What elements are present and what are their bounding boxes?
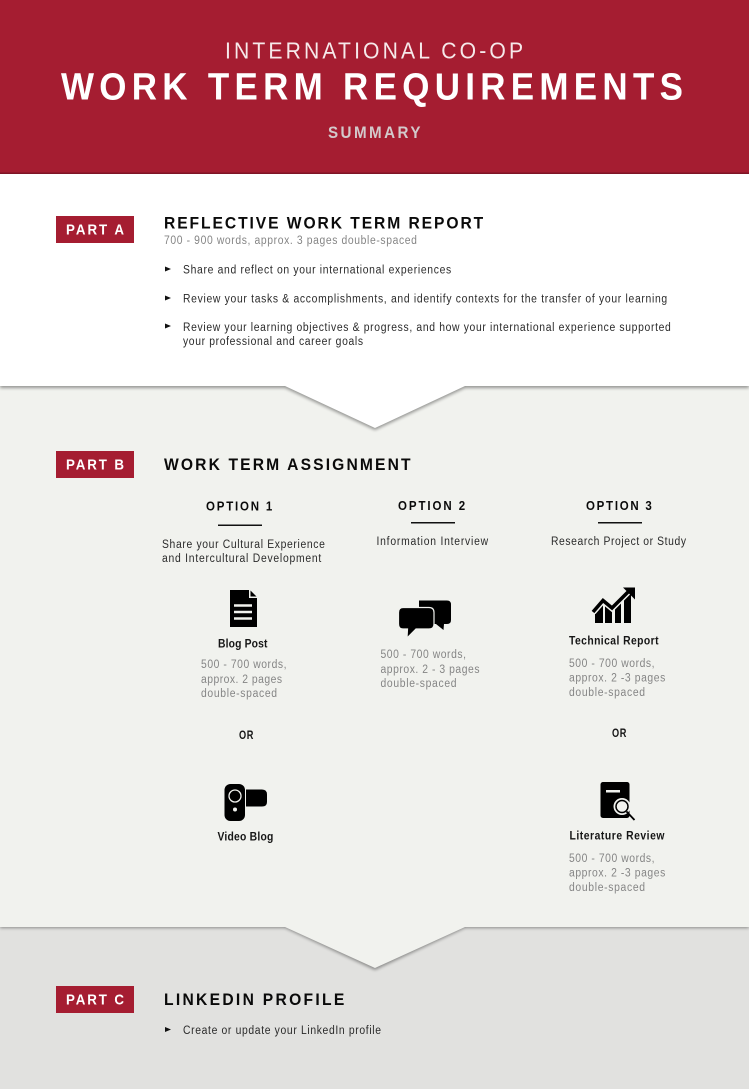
option 2 description: Information Interview [376,536,488,548]
bullet list [165,264,671,348]
or label: OR [612,728,627,740]
interview length [380,649,480,690]
option 1 description [162,539,325,565]
technical report length [569,658,666,699]
badge: part C [56,986,134,1013]
label: literature review: Literature Review [569,830,665,843]
eyebrow title: INTERNATIONAL CO-OP [225,38,523,64]
bullet list: Review your learning objectives & progress, and how your international experience supported [183,322,671,334]
panel: header banner [0,0,749,174]
badge: part B: PART B [66,456,124,473]
icon: video camera [224,784,267,821]
bullet list: Review your tasks & accomplishments, and identify contexts for the transfer of your learning [183,293,667,306]
badge: part A [56,216,134,243]
main title: WORK TERM REQUIREMENTS [61,65,683,108]
subtitle: SUMMARY [328,124,421,142]
technical report length: approx. 2 -3 pages [569,672,666,685]
heading: linkedin profile: LINKEDIN PROFILE [164,991,344,1009]
interview length: 500 - 700 words, [381,649,466,661]
report length note: 700 - 900 words, approx. 3 pages double-spaced [164,235,417,247]
blog post length: approx. 2 pages [201,674,283,686]
label: video blog: Video Blog [217,831,273,844]
badge: part B [56,451,134,478]
bullet list: Share and reflect on your international experiences [183,264,452,277]
column: option 3 [551,499,687,894]
option 2 heading: OPTION 2 [398,499,465,513]
panel: part A background [0,170,749,430]
linkedin bullet: Create or update your LinkedIn profile [183,1025,381,1037]
label: technical report: Technical Report [569,635,659,648]
option 1 heading: OPTION 1 [206,499,273,514]
icon: speech bubbles [398,600,451,638]
icon: document [230,590,258,627]
technical report length: 500 - 700 words, [569,658,655,670]
option 1 description: Share your Cultural Experience [162,539,325,551]
icon: book with magnifier [600,782,634,820]
blog post length [201,659,286,700]
heading: reflective report: REFLECTIVE WORK TERM REPORT [164,214,483,232]
panel: part C background [0,920,749,1089]
badge: part A: PART A [66,221,124,238]
blog post length: double-spaced [201,688,277,700]
interview length: approx. 2 - 3 pages [381,664,480,676]
panel: part B background [0,380,749,970]
bullet list: your professional and career goals [183,336,364,348]
literature review length [569,853,666,894]
column: option 1 [162,499,325,844]
section: part A [56,214,671,348]
label: blog post: Blog Post [218,638,268,651]
badge: part C: PART C [66,991,124,1008]
or label: OR [239,730,254,742]
section: part C [56,986,381,1037]
option 3 description: Research Project or Study [551,536,687,548]
literature review length: approx. 2 -3 pages [569,867,666,880]
technical report length: double-spaced [569,687,645,699]
literature review length: 500 - 700 words, [569,853,655,865]
heading: work term assignment: WORK TERM ASSIGNMENT [164,456,411,474]
column: option 2 [376,499,488,690]
option 1 description: and Intercultural Development [162,553,321,565]
interview length: double-spaced [381,678,457,690]
icon: growth chart [593,588,635,623]
option 3 heading: OPTION 3 [586,499,652,513]
blog post length: 500 - 700 words, [201,659,286,671]
literature review length: double-spaced [569,882,645,894]
section: part B [56,451,687,894]
